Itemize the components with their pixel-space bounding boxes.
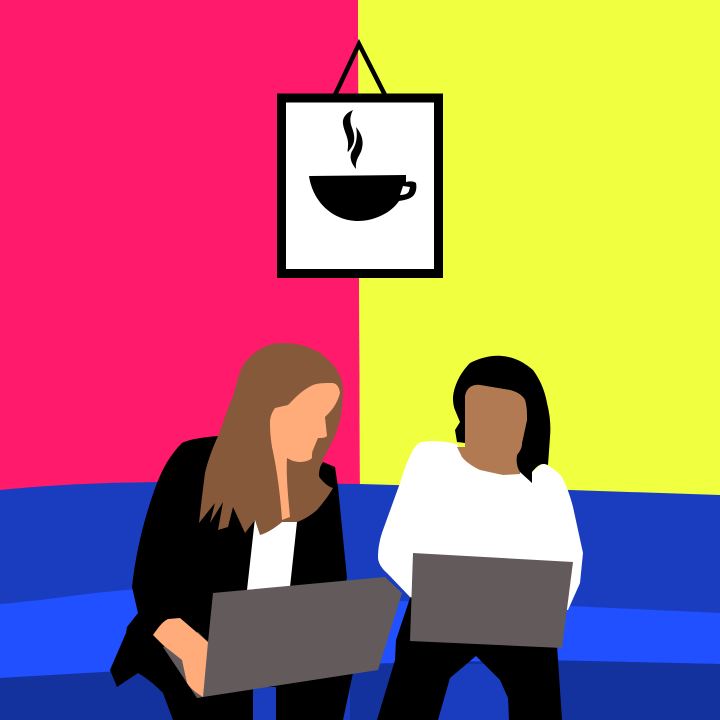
picture: framed coffee cup bbox=[282, 44, 438, 274]
figure: woman with long brown hair bbox=[110, 343, 402, 720]
sofa front left bbox=[0, 668, 200, 720]
neck and face bbox=[457, 385, 527, 475]
panel: sofa bbox=[0, 482, 720, 720]
laptop bbox=[163, 577, 402, 698]
black hair bbox=[453, 356, 550, 483]
jacket and legs bbox=[110, 436, 353, 720]
trousers bbox=[377, 598, 562, 720]
sweater bbox=[378, 441, 583, 610]
icon: coffee cup bbox=[309, 175, 416, 221]
laptop bbox=[410, 553, 573, 648]
hair bbox=[199, 343, 343, 535]
sofa back bbox=[0, 482, 720, 720]
panel: pink wall bbox=[0, 0, 360, 500]
frame bbox=[282, 98, 438, 274]
figure: woman with black hair bbox=[377, 356, 583, 720]
face and neck bbox=[270, 383, 340, 520]
hand bbox=[153, 618, 208, 697]
shirt bbox=[247, 518, 297, 590]
sofa seat right bbox=[370, 600, 720, 664]
icon: steam bbox=[343, 110, 363, 169]
sofa seat left bbox=[0, 589, 400, 678]
panel: yellow wall bbox=[358, 0, 720, 500]
hanger bbox=[335, 44, 385, 95]
sofa front right bbox=[350, 660, 720, 720]
sofa front between legs bbox=[250, 664, 520, 720]
